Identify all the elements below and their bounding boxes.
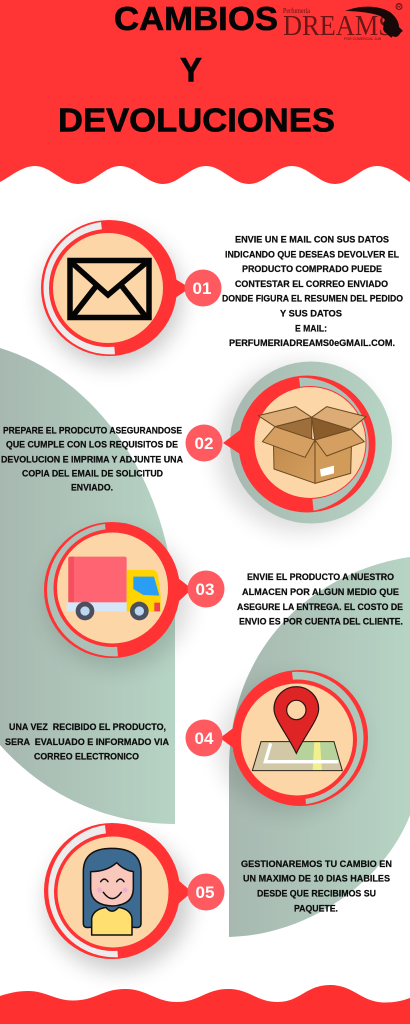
step 5 text: UN MAXIMO DE 10 DIAS HABILES <box>243 874 391 885</box>
badge 03: 03 <box>196 580 214 599</box>
step 4 text: SERA EVALUADO E INFORMADO VIA <box>5 737 169 748</box>
step 1 text <box>222 235 403 349</box>
footer banner <box>0 985 410 1024</box>
step 2 text: QUE CUMPLE CON LOS REQUISITOS DE <box>6 440 179 451</box>
header banner <box>0 0 410 184</box>
step 4 text: CORREO ELECTRONICO <box>34 752 139 763</box>
step 2 text: PREPARE EL PRODCUTO ASEGURANDOSE <box>3 425 183 436</box>
step 3 ring <box>44 522 180 658</box>
step 2 <box>186 362 392 532</box>
badge 03 <box>178 570 224 608</box>
step 2 text: COPIA DEL EMAIL DE SOLICITUD <box>22 469 163 480</box>
step 2 text: ENVIADO. <box>71 483 113 494</box>
logo: Perfumeria Dreams: Perfumería <box>283 7 311 15</box>
step 4 text <box>5 722 169 763</box>
step 1 text: E MAIL: <box>295 323 327 334</box>
badge 05: 05 <box>196 883 214 902</box>
step 4 <box>186 670 368 813</box>
step 5 text: GESTIONAREMOS TU CAMBIO EN <box>241 859 392 870</box>
logo: Perfumeria Dreams: POR COMERCIAL JUB <box>344 37 382 41</box>
step 1 text: PRODUCTO COMPRADO PUEDE <box>242 264 383 275</box>
step 2 text: DEVOLUCION E IMPRIMA Y ADJUNTE UNA <box>1 454 183 465</box>
step 1 text: PERFUMERIADREAMS0eGMAIL.COM. <box>229 338 395 349</box>
step 3 text: ENVIE EL PRODUCTO A NUESTRO <box>247 572 394 583</box>
step 3 <box>44 522 224 668</box>
icon: woman avatar <box>83 848 141 935</box>
green shape right <box>229 557 410 937</box>
step 1 ring <box>41 220 177 356</box>
step 2 text <box>1 425 183 494</box>
icon: envelope <box>70 260 149 318</box>
badge 02: 02 <box>195 434 213 453</box>
step 1 text: Y SUS DATOS <box>280 308 343 320</box>
title: DEVOLUCIONES <box>58 102 335 138</box>
step 4 text: UNA VEZ RECIBIDO EL PRODUCTO, <box>9 722 166 733</box>
badge 01: 01 <box>193 279 211 298</box>
step 5 text: PAQUETE. <box>294 903 338 914</box>
step 2 ring <box>238 376 376 512</box>
step 1 <box>41 220 222 366</box>
step 3 text <box>237 572 404 627</box>
step 5 ring <box>44 823 180 959</box>
badge 01 <box>172 270 222 306</box>
icon: truck <box>67 557 161 620</box>
step 1 text: CONTESTAR EL CORREO ENVIADO <box>235 279 388 290</box>
badge 02 <box>186 424 240 462</box>
title: CAMBIOS <box>114 0 278 37</box>
step 5 <box>44 823 224 971</box>
step 5 text <box>241 859 392 914</box>
step 5 text: DESDE QUE RECIBIMOS SU <box>257 889 376 900</box>
badge 04: 04 <box>195 729 214 748</box>
step 1 text: ENVIE UN E MAIL CON SUS DATOS <box>235 235 390 246</box>
green shape left <box>0 348 175 824</box>
step 3 text: ALMACEN POR ALGUN MEDIO QUE <box>242 587 400 598</box>
icon: open box <box>258 407 366 483</box>
step 4 ring <box>232 670 368 806</box>
step 2 green disc <box>230 362 392 524</box>
logo: Perfumeria Dreams: R <box>397 4 401 10</box>
step 1 text: INDICANDO QUE DESEAS DEVOLVER EL <box>225 250 399 260</box>
badge 04 <box>186 720 236 756</box>
icon: map pin <box>252 687 342 771</box>
title <box>58 0 335 138</box>
badge 05 <box>178 874 224 910</box>
title: Y <box>180 52 202 90</box>
logo: Perfumeria Dreams: DREAMS <box>283 10 393 42</box>
